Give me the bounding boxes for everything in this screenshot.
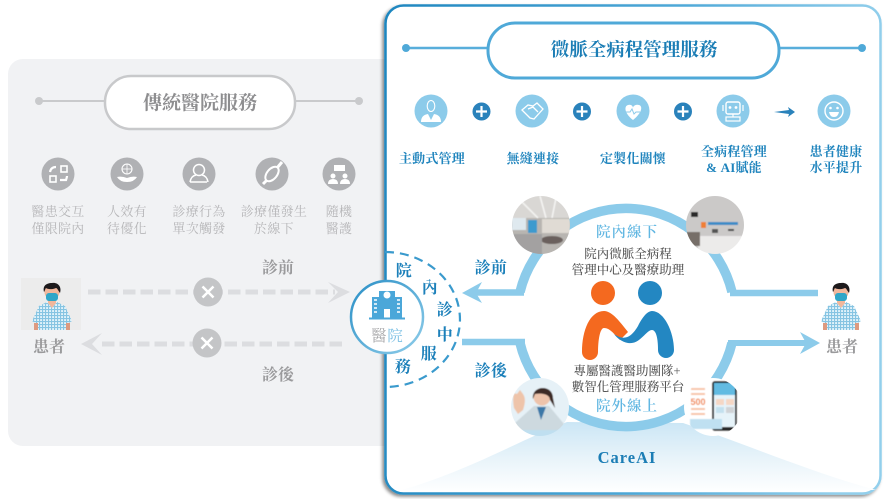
label: random care: 隨機: [326, 204, 352, 219]
icon: heart pulse: [616, 94, 650, 128]
label: interaction limited to hospital: 僅限院內: [31, 221, 85, 236]
label: seamless connection: 無縫連接: [507, 151, 560, 166]
label: interaction limited to hospital: 醫患交互: [31, 204, 85, 219]
patient illustration: left: [21, 278, 81, 330]
photo: app screenshot: [684, 378, 738, 436]
text: in-hospital centre description: 管理中心及醫療助理: [572, 262, 685, 277]
label: post-visit: 診後: [475, 361, 508, 380]
label: in-hospital service, curved: 內: [422, 279, 438, 297]
label: proactive management: 主動式管理: [399, 151, 465, 166]
icon: handshake: [516, 94, 548, 128]
label: patient left: 患者: [33, 337, 65, 356]
arrow: result: [774, 107, 795, 117]
label: efficiency: 待優化: [107, 221, 147, 236]
icon: proactive manager: [414, 94, 448, 128]
ring: bottom arc with post-visit line and patient arrow: [462, 332, 820, 427]
logo: WeiMai: [582, 281, 674, 360]
label: whole-course management and AI: 全病程管理: [701, 144, 767, 159]
icon: smile: [818, 94, 850, 128]
panel: WeiMai whole-course management service: [351, 6, 880, 494]
plus: [674, 102, 692, 120]
photo: clinic lounge: [512, 196, 570, 254]
label: pre-visit: 診前: [475, 259, 507, 277]
arrow: pre-visit broken: [88, 278, 350, 306]
label: in-hospital service, curved: 務: [395, 358, 411, 376]
icon: AI robot: [716, 94, 750, 128]
icon: offline only broken link: [256, 158, 288, 190]
heading: WeiMai service: [402, 23, 866, 78]
hospital badge: 醫: [371, 327, 387, 345]
label: CareAI: CareAI: [598, 448, 656, 467]
label: in-hospital service, curved: 院: [396, 261, 412, 280]
label: pre-visit: 診前: [262, 259, 294, 277]
plus: [472, 102, 490, 120]
photo: medical assistant: [511, 378, 569, 436]
label: single contact: 診療行為: [172, 204, 226, 219]
icon: single contact person: [182, 158, 216, 190]
ring: top arc with pre-visit arrow and patient line: [462, 208, 818, 303]
label: offline only: 診療僅發生: [241, 204, 307, 219]
hospital: in-hospital service dashed zone: [351, 252, 460, 387]
label: efficiency: 人效有: [107, 204, 147, 219]
heading: WeiMai service: 微脈全病程管理服務: [551, 40, 718, 61]
heading: traditional hospital service: [35, 76, 363, 129]
text: dedicated team description: 專屬醫護醫助團隊+: [573, 364, 681, 378]
label: in-hospital service, curved: [395, 261, 453, 376]
label: in-hospital service, curved: 診: [437, 301, 453, 319]
label: whole-course management and AI: & AI賦能: [706, 160, 762, 175]
photo: app screenshot: 500: [690, 397, 706, 407]
arrow: post-visit broken: [81, 328, 343, 358]
label: in-hospital service, curved: 服: [421, 345, 437, 363]
text: in-hospital centre description: 院內微脈全病程: [584, 247, 672, 261]
label: in-hospital offline: 院內線下: [596, 224, 658, 241]
label: patient health improvement: 患者健康: [810, 144, 862, 159]
label: post-visit: 診後: [262, 365, 295, 384]
label: patient health improvement: 水平提升: [810, 160, 862, 175]
plus: [573, 102, 591, 120]
patient illustration: right: [821, 283, 861, 330]
icon: interaction limited to hospital: [42, 158, 74, 190]
heading: traditional hospital service: 傳統醫院服務: [143, 92, 257, 114]
label: single contact: 單次觸發: [172, 221, 226, 236]
text: dedicated team description: 數智化管理服務平台: [572, 379, 685, 394]
hospital badge: 院: [387, 327, 403, 345]
label: in-hospital service, curved: 中: [437, 326, 453, 344]
label: random care: 醫護: [326, 221, 352, 236]
hospital badge: [351, 281, 423, 353]
label: customised care: 定製化關懷: [600, 151, 666, 166]
label: patient right: 患者: [826, 337, 858, 356]
label: out-of-hospital online: 院外線上: [596, 398, 658, 415]
icon: efficiency hand and globe: [110, 158, 144, 190]
photo: reception desk: [686, 196, 744, 254]
icon: random care group: [322, 158, 356, 190]
label: offline only: 於線下: [254, 221, 294, 236]
mound: CareAI base: [402, 422, 876, 490]
panel: traditional hospital service: [8, 59, 408, 446]
